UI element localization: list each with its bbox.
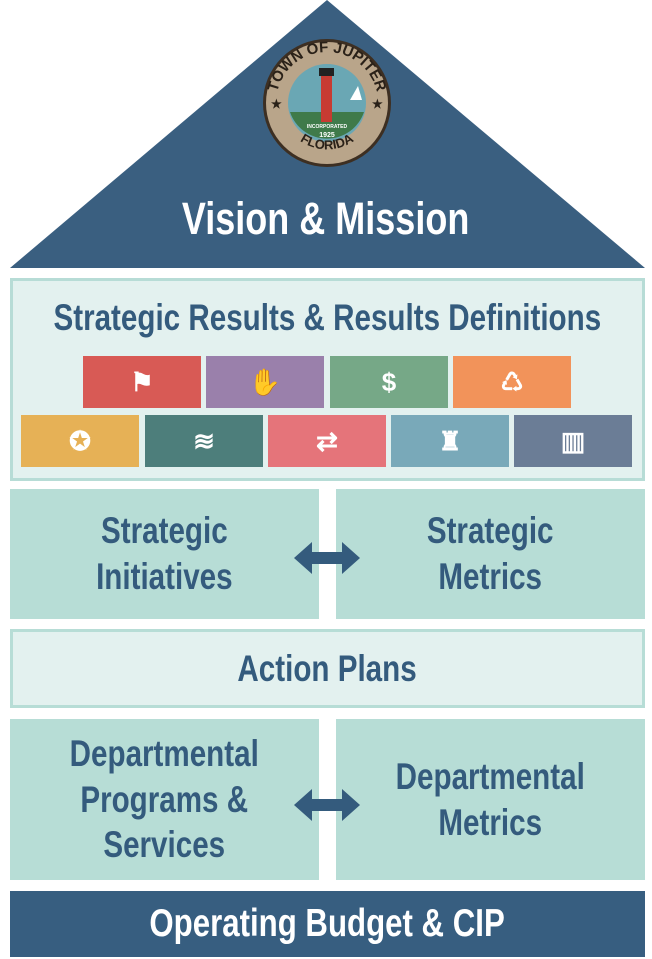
roof: vision & mission <box>10 0 645 268</box>
arrow: departmental <box>294 789 360 821</box>
icon tiles: ▥ <box>561 426 585 456</box>
icon tiles: ⚑ <box>130 366 154 396</box>
seal: ★ <box>372 97 383 111</box>
icon tiles: ✋ <box>249 366 281 396</box>
seal: FLORIDA <box>300 134 354 150</box>
arrow: strategic <box>294 542 360 574</box>
panel: action plans <box>10 629 645 708</box>
seal: INCORPORATED <box>307 124 347 130</box>
panel: departmental programs: Services <box>104 824 225 865</box>
panel: departmental programs: Programs & <box>81 779 248 820</box>
base: operating budget <box>10 891 645 957</box>
panel: strategic initiatives <box>10 489 319 619</box>
icon tiles: ✪ <box>69 426 91 456</box>
panel: departmental programs <box>10 719 319 880</box>
title: vision & mission: Vision & Mission <box>182 193 470 244</box>
panel: strategic metrics: Metrics <box>439 556 542 597</box>
panel: departmental programs: Departmental <box>70 733 259 774</box>
panel: strategic initiatives: Strategic <box>101 510 228 551</box>
panel: departmental metrics: Departmental <box>396 756 585 797</box>
icon tiles <box>21 356 632 467</box>
panel: strategic results <box>10 278 645 481</box>
seal <box>263 39 391 167</box>
panel: strategic metrics <box>336 489 645 619</box>
panel: departmental metrics <box>336 719 645 880</box>
seal: 1925 <box>319 132 335 139</box>
seal: TOWN OF JUPITER <box>267 42 386 92</box>
icon tiles: ♺ <box>500 366 524 396</box>
panel: strategic initiatives: Initiatives <box>96 556 233 597</box>
icon tiles: ♜ <box>438 426 462 456</box>
base: operating budget: Operating Budget & CIP <box>150 902 505 945</box>
panel: strategic metrics: Strategic <box>427 510 554 551</box>
seal: ★ <box>271 97 282 111</box>
panel: action plans: Action Plans <box>238 648 417 689</box>
panel: departmental metrics: Metrics <box>439 802 542 842</box>
icon tiles: ≋ <box>193 426 215 456</box>
heading: Strategic Results & Results Definitions <box>54 297 601 338</box>
icon tiles: $ <box>382 366 396 396</box>
icon tiles: ⇄ <box>316 426 338 456</box>
